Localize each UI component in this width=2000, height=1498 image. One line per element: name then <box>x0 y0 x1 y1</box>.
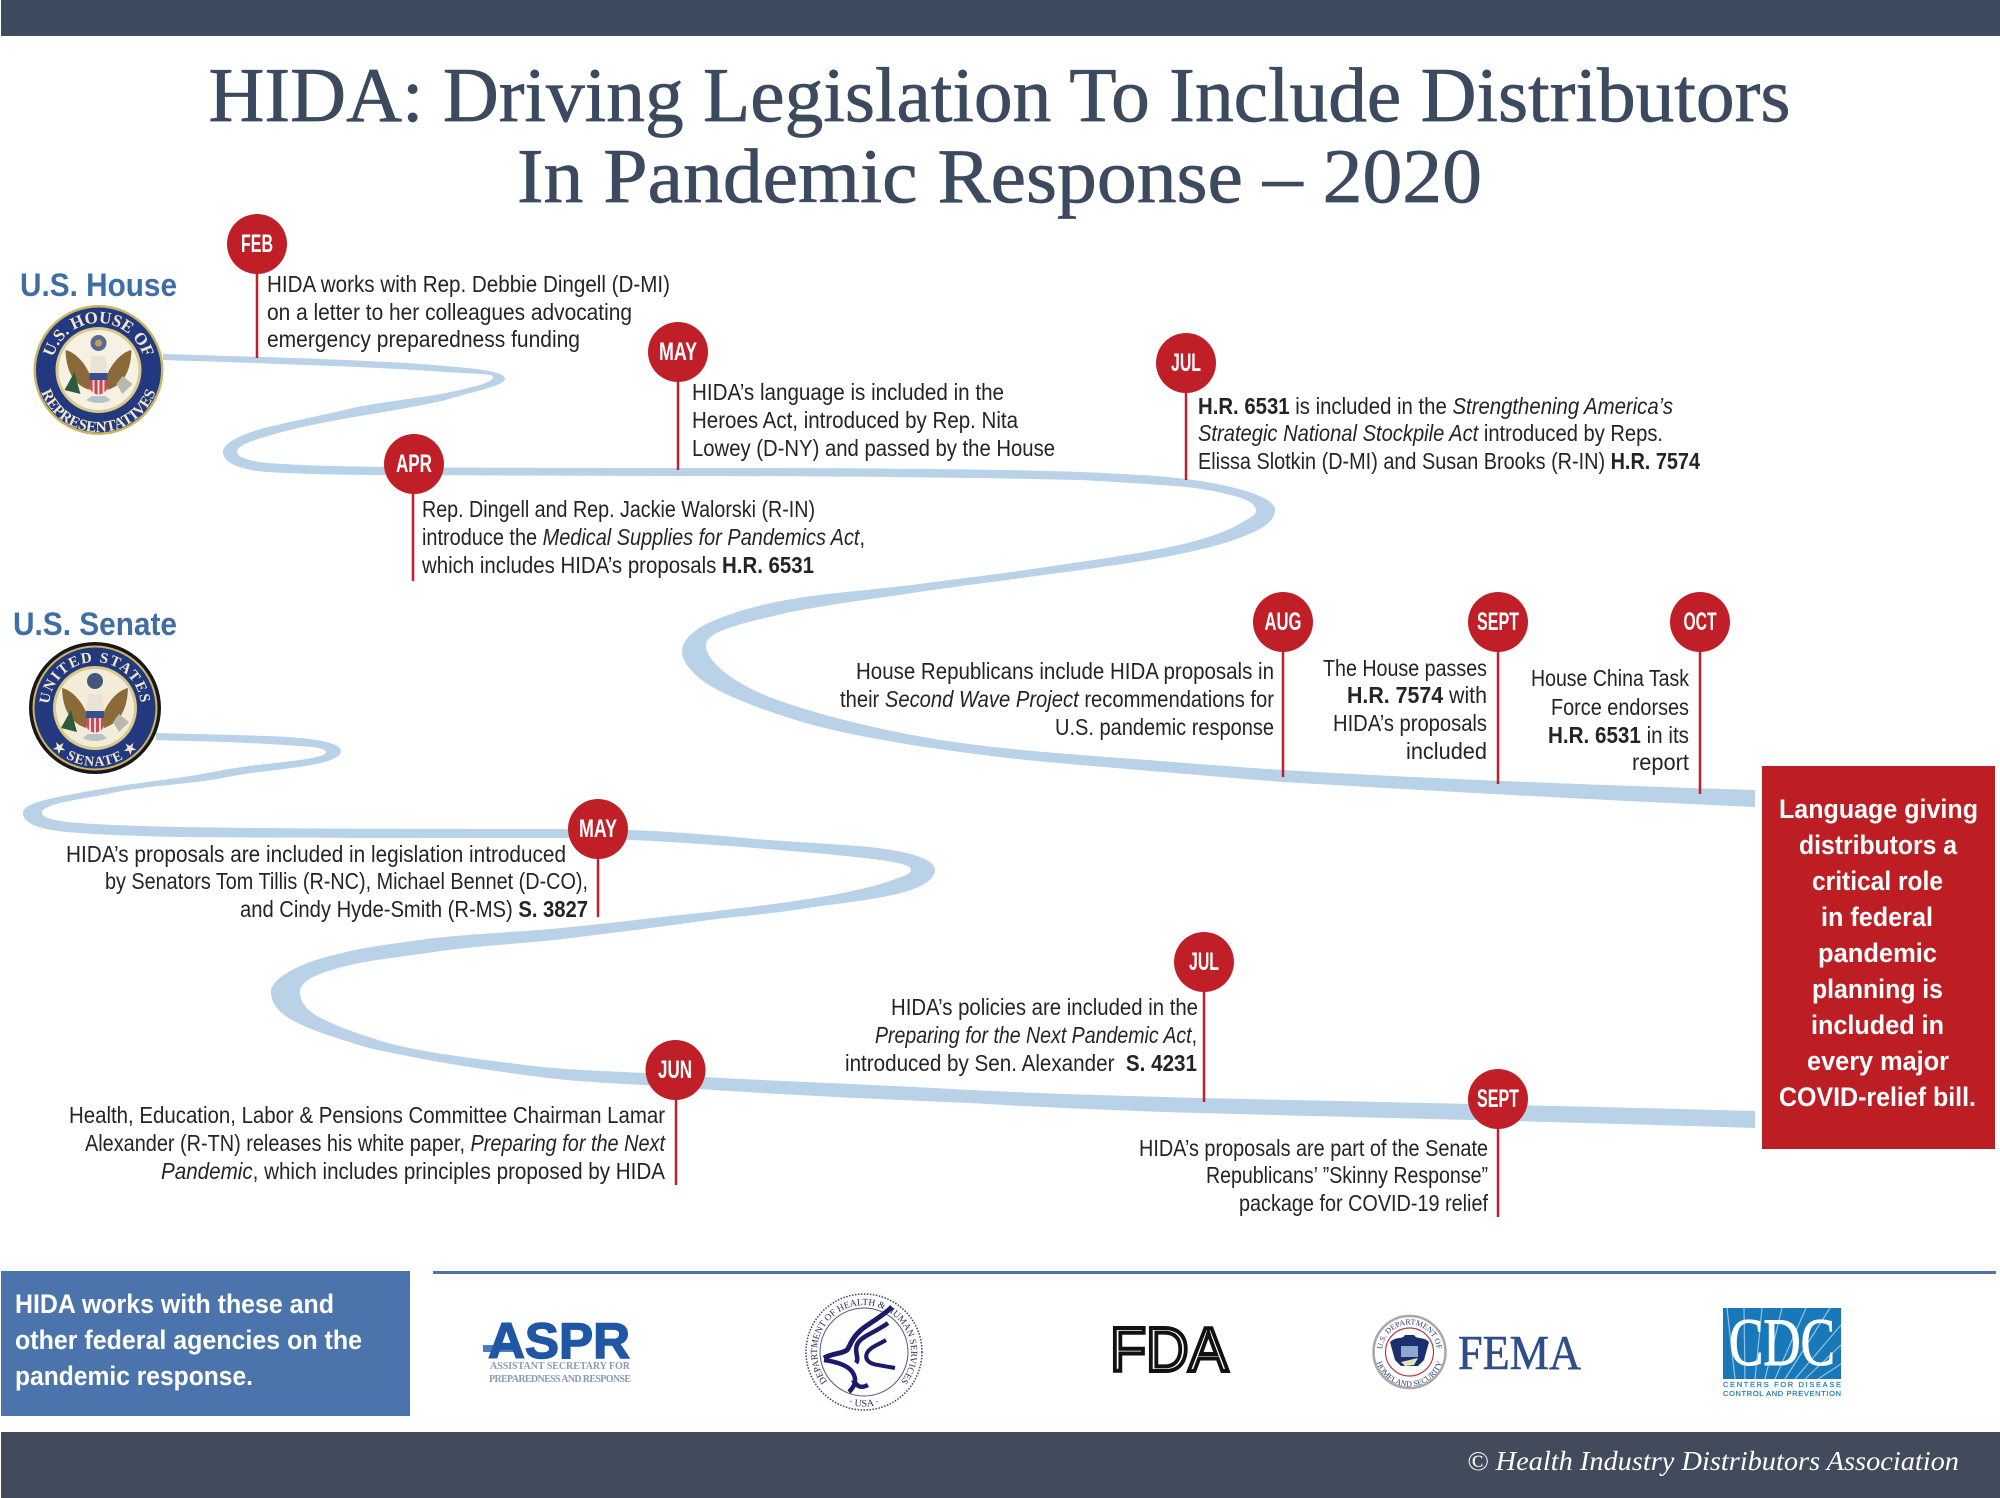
text: July event: Elissa Slotkin (D-MI) and Susan Brooks (R-IN) H.R. 7574 <box>1198 448 1700 474</box>
pin: AUG <box>1253 592 1313 777</box>
text: September event: HIDA’s proposals <box>1333 710 1487 736</box>
text: June Senate event: Alexander (R-TN) releases his white paper, Preparing for the Next <box>85 1130 666 1156</box>
text: July event: Strategic National Stockpile Act introduced by Reps. <box>1198 420 1663 446</box>
text: May Senate event: and Cindy Hyde-Smith (R-MS) S. 3827 <box>240 896 588 922</box>
text: September event <box>1323 655 1487 764</box>
callout: blue agencies box: HIDA works with these and <box>15 1289 334 1319</box>
icon: Senate seal: UNITED STATES <box>39 652 150 702</box>
pin: SEPT <box>1468 1069 1528 1217</box>
text: August event: House Republicans include HIDA proposals in <box>856 658 1274 684</box>
pin: JUL: JUL <box>1189 948 1219 976</box>
callout: red outcome box: pandemic <box>1818 938 1937 968</box>
text: October event: Force endorses <box>1551 694 1689 720</box>
text: September event: included <box>1406 738 1487 764</box>
text: July Senate event: HIDA’s policies are included in the <box>891 994 1198 1020</box>
text: February event <box>267 271 670 352</box>
icon: ASPR logo: PREPAREDNESS AND RESPONSE <box>489 1374 631 1385</box>
heading: U.S. Senate: U.S. Senate <box>13 606 177 642</box>
text: September Senate event: package for COVID-19 relief <box>1239 1190 1489 1216</box>
pin: JUN: JUN <box>658 1056 692 1084</box>
text: October event <box>1531 665 1690 775</box>
pin: MAY: MAY <box>659 338 697 366</box>
pin: SEPT: SEPT <box>1477 608 1519 636</box>
icon: CDC logo: CENTERS FOR DISEASE <box>1723 1380 1841 1389</box>
pin: AUG: AUG <box>1264 608 1302 636</box>
icon: House seal: REPRESENTATIVES <box>41 388 155 432</box>
footer bar <box>1 1432 2000 1498</box>
title <box>208 52 1790 219</box>
icon: Senate seal: ★ SENATE ★ <box>53 742 136 766</box>
text: September Senate event: HIDA’s proposals are part of the Senate <box>1139 1135 1488 1161</box>
title: In Pandemic Response – 2020 <box>517 133 1482 219</box>
text: April event: Rep. Dingell and Rep. Jackie Walorski (R-IN) <box>422 496 815 522</box>
pin: OCT: OCT <box>1684 608 1716 636</box>
pin: SEPT: SEPT <box>1477 1085 1519 1113</box>
callout: blue agencies box: pandemic response. <box>15 1361 253 1391</box>
callout: red outcome box: critical role <box>1812 866 1943 896</box>
pin: MAY: MAY <box>579 815 617 843</box>
text: May Senate event: by Senators Tom Tillis (R-NC), Michael Bennet (D-CO), <box>105 868 588 894</box>
footer bar: © Health Industry Distributors Association <box>1467 1446 1959 1476</box>
text: July event <box>1198 393 1700 474</box>
title: HIDA: Driving Legislation To Include Distributors <box>208 52 1790 138</box>
icon: FEMA logo: FEMA <box>1458 1325 1582 1380</box>
text: June Senate event: Health, Education, Labor & Pensions Committee Chairman Lamar <box>69 1102 665 1128</box>
icon: CDC logo: CONTROL AND PREVENTION <box>1723 1389 1841 1398</box>
text: May event: HIDA’s language is included in the <box>692 379 1004 405</box>
text: June Senate event <box>69 1102 666 1184</box>
icon: CDC logo: CDC <box>1729 1304 1835 1380</box>
text: October event: House China Task <box>1531 665 1689 691</box>
panel: U.S. House timeline <box>20 214 1755 807</box>
text: April event: introduce the Medical Supplies for Pandemics Act, <box>422 524 865 550</box>
callout: red outcome box: in federal <box>1821 902 1933 932</box>
text: July Senate event: Preparing for the Next Pandemic Act, <box>875 1022 1197 1048</box>
pin: MAY <box>568 799 628 917</box>
icon: ASPR logo: ASPR <box>488 1313 630 1369</box>
text: February event: HIDA works with Rep. Debbie Dingell (D-MI) <box>267 271 670 297</box>
icon: FEMA logo <box>1372 1314 1582 1390</box>
icon: HHS seal: DEPARTMENT OF HEALTH & HUMAN SERVICES <box>810 1298 918 1385</box>
icon: House seal <box>34 305 164 435</box>
text: September event: H.R. 7574 with <box>1347 682 1487 708</box>
Senate ribbon path <box>23 733 1755 1128</box>
icon: House seal: U.S. HOUSE OF <box>42 312 154 355</box>
text: June Senate event: Pandemic, which includes principles proposed by HIDA <box>161 1158 666 1184</box>
text: September Senate event <box>1139 1135 1489 1216</box>
callout: red outcome box: every major <box>1807 1046 1949 1076</box>
pin: FEB <box>227 214 287 358</box>
text: July Senate event: introduced by Sen. Alexander S. 4231 <box>845 1050 1197 1076</box>
heading: U.S. House: U.S. House <box>20 267 177 303</box>
pin: OCT <box>1670 592 1730 794</box>
text: April event: which includes HIDA’s proposals H.R. 6531 <box>421 552 814 578</box>
icon: HHS seal <box>805 1293 923 1411</box>
pin: JUL <box>1174 932 1234 1102</box>
text: May event: Heroes Act, introduced by Rep. Nita <box>692 407 1018 433</box>
text: May event <box>692 379 1055 461</box>
text: August event <box>840 658 1274 740</box>
pin: MAY <box>648 322 708 470</box>
callout: red outcome box: planning is <box>1812 974 1943 1004</box>
pin: JUL <box>1156 333 1216 480</box>
text: July event: H.R. 6531 is included in the Strengthening America’s <box>1198 393 1673 419</box>
icon: FEMA logo: HOMELAND SECURITY <box>1376 1360 1442 1386</box>
pin: JUN <box>646 1040 706 1185</box>
text: April event <box>421 496 865 578</box>
text: August event: U.S. pandemic response <box>1055 714 1274 740</box>
top bar <box>1 0 2000 36</box>
text: May Senate event <box>66 841 588 922</box>
text: May event: Lowey (D-NY) and passed by the House <box>692 435 1055 461</box>
icon: HHS seal: · USA · <box>850 1399 878 1407</box>
text: May Senate event: HIDA’s proposals are included in legislation introduced <box>66 841 566 867</box>
pin: SEPT <box>1468 592 1528 784</box>
callout: red outcome box <box>1762 766 1995 1149</box>
House ribbon path <box>163 354 1755 807</box>
icon: ASPR logo: ASSISTANT SECRETARY FOR <box>490 1361 631 1372</box>
callout: red outcome box: distributors a <box>1799 830 1958 860</box>
icon: Senate seal <box>29 642 161 774</box>
text: February event: on a letter to her colleagues advocating <box>267 299 632 325</box>
pin: FEB: FEB <box>241 230 273 258</box>
callout: red outcome box: Language giving <box>1779 794 1978 824</box>
callout: red outcome box: included in <box>1811 1010 1944 1040</box>
text: August event: their Second Wave Project recommendations for <box>840 686 1274 712</box>
panel: U.S. Senate timeline <box>13 606 1755 1217</box>
icon: FDA logo: FDA <box>1110 1316 1229 1385</box>
pin: JUL: JUL <box>1171 349 1201 377</box>
text: September event: The House passes <box>1323 655 1487 681</box>
pin: APR <box>384 434 444 581</box>
callout: red outcome box: COVID-relief bill. <box>1779 1082 1976 1112</box>
icon: CDC logo <box>1723 1304 1841 1398</box>
panel: federal agencies <box>1 1271 1996 1416</box>
callout: blue agencies box: other federal agencies on the <box>15 1325 362 1355</box>
text: September Senate event: Republicans’ ”Skinny Response” <box>1206 1162 1488 1188</box>
text: October event: H.R. 6531 in its <box>1548 722 1689 748</box>
icon: FEMA logo: U.S. DEPARTMENT OF <box>1376 1319 1442 1348</box>
callout: blue agencies box <box>1 1271 410 1416</box>
text: July Senate event <box>845 994 1198 1076</box>
text: October event: report <box>1632 749 1690 775</box>
pin: APR: APR <box>396 450 432 478</box>
text: February event: emergency preparedness funding <box>267 326 580 352</box>
